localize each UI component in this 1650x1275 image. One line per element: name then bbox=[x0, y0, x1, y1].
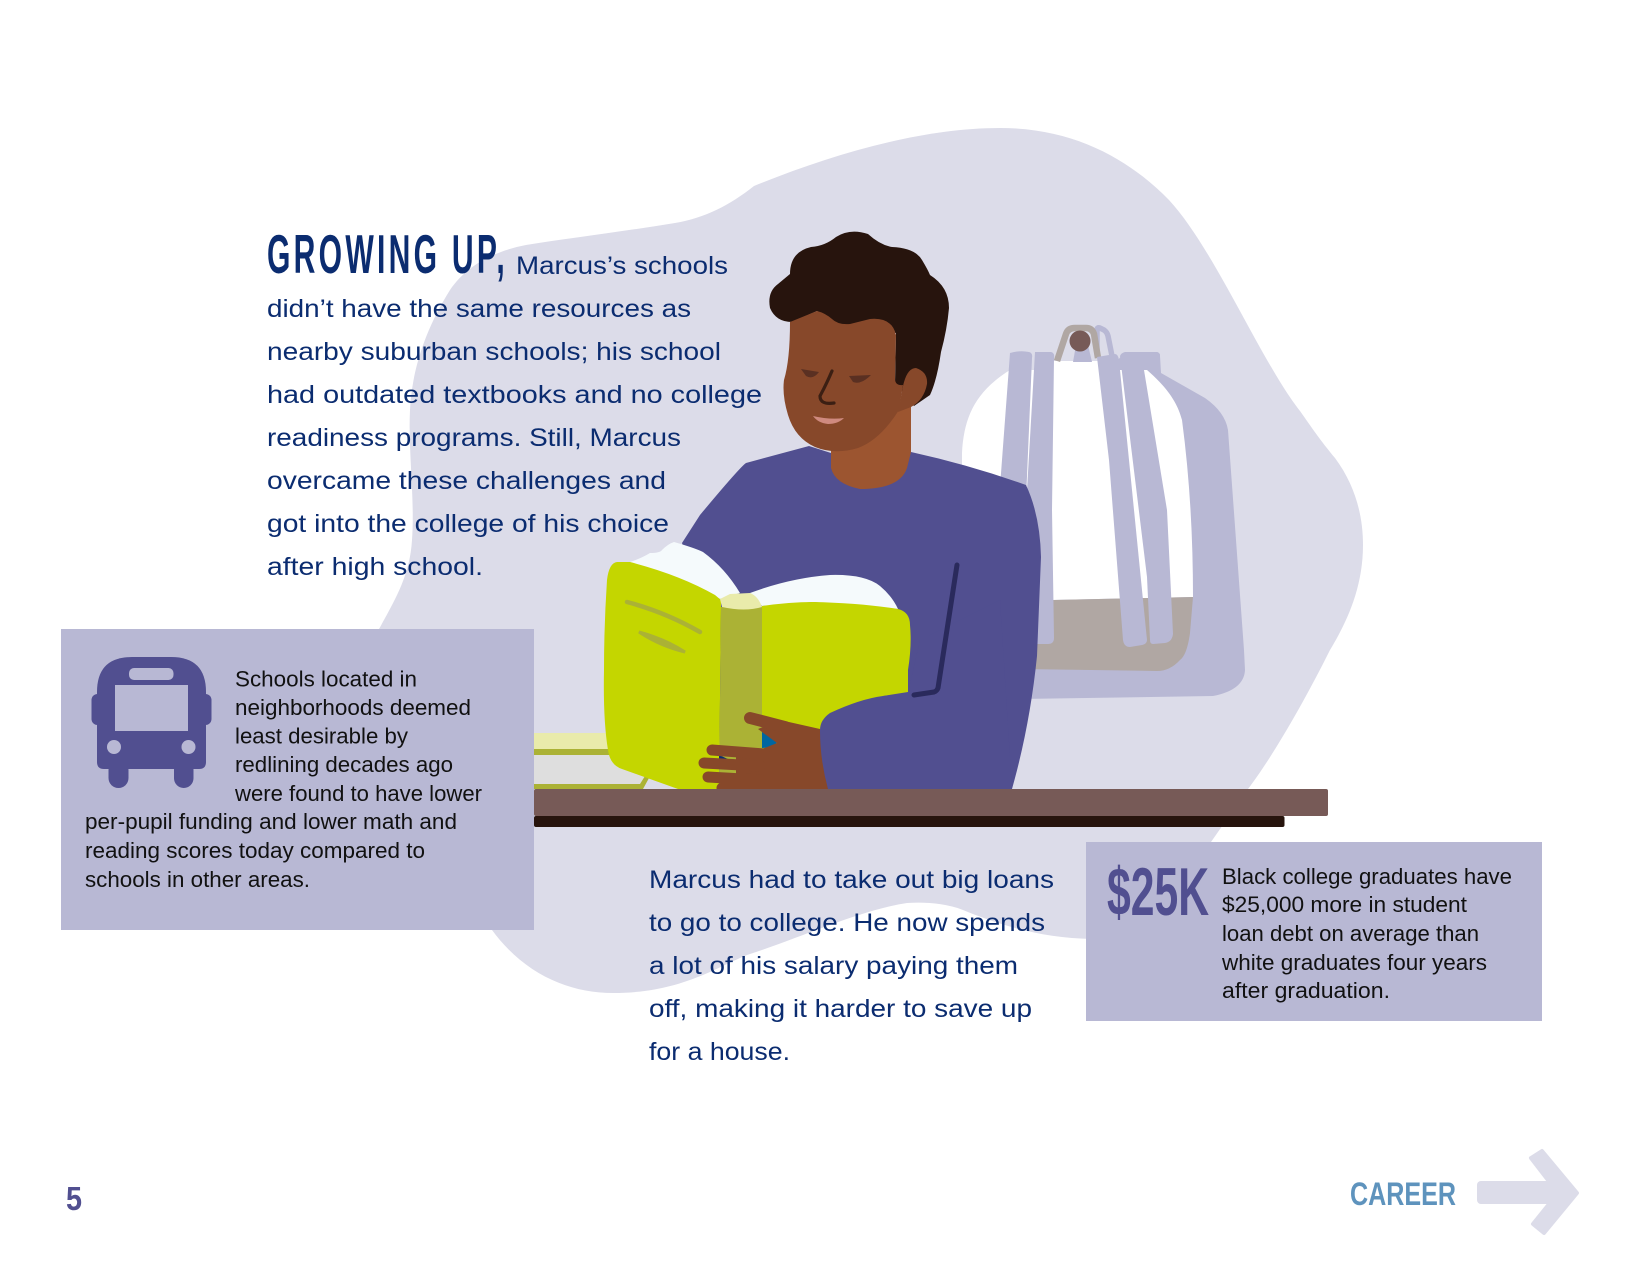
sleeve seam detail bbox=[914, 565, 957, 695]
eyes bbox=[801, 369, 871, 383]
loans paragraph: for a house. bbox=[649, 1038, 790, 1066]
intro text: Marcus’s schools bbox=[516, 252, 728, 280]
panel text bbox=[85, 666, 482, 892]
panel: redlining fact bbox=[61, 629, 534, 930]
panel text: reading scores today compared to bbox=[85, 838, 425, 863]
intro text: readiness programs. Still, Marcus bbox=[267, 424, 681, 452]
table bbox=[534, 789, 1328, 827]
panel text: after graduation. bbox=[1222, 978, 1390, 1003]
illustration: hand bbox=[704, 718, 828, 789]
panel text: neighborhoods deemed bbox=[235, 695, 471, 720]
illustration: sweater body bbox=[682, 446, 1041, 789]
illustration: open book bbox=[604, 542, 911, 789]
stat: $25K: $25K bbox=[1107, 854, 1209, 930]
intro text: after high school. bbox=[267, 553, 483, 581]
panel text: redlining decades ago bbox=[235, 752, 453, 777]
panel: student debt fact bbox=[1086, 842, 1542, 1021]
next section label: CAREER bbox=[1350, 1176, 1456, 1212]
panel text: least desirable by bbox=[235, 724, 408, 748]
panel text: were found to have lower bbox=[234, 781, 482, 806]
nose bbox=[820, 371, 834, 403]
intro text: nearby suburban schools; his school bbox=[267, 338, 721, 366]
intro text: got into the college of his choice bbox=[267, 510, 669, 538]
loans paragraph: to go to college. He now spends bbox=[649, 909, 1045, 937]
icon: school bus bbox=[92, 657, 212, 788]
loans paragraph: a lot of his salary paying them bbox=[649, 952, 1018, 980]
panel text: per-pupil funding and lower math and bbox=[85, 809, 457, 834]
intro text: didn’t have the same resources as bbox=[267, 295, 691, 323]
loans paragraph: off, making it harder to save up bbox=[649, 995, 1032, 1023]
ear bbox=[898, 368, 927, 412]
panel text: loan debt on average than bbox=[1222, 921, 1479, 946]
illustration: marcus head and neck bbox=[769, 232, 949, 489]
arrow bbox=[1477, 1151, 1577, 1233]
neck bbox=[831, 400, 911, 489]
illustration: sleeve bbox=[820, 600, 1012, 789]
face bbox=[784, 311, 903, 451]
panel text bbox=[1221, 864, 1512, 1003]
background blob bbox=[379, 128, 1363, 993]
panel text: Black college graduates have bbox=[1222, 864, 1512, 889]
panel text: $25,000 more in student bbox=[1222, 892, 1467, 917]
intro text: overcame these challenges and bbox=[267, 467, 666, 495]
loans paragraph bbox=[649, 866, 1054, 1066]
panel text: Schools located in bbox=[235, 666, 417, 692]
hair bbox=[769, 232, 949, 406]
intro text bbox=[267, 252, 762, 581]
heading: GROWING UP, bbox=[267, 223, 508, 285]
page number: 5 bbox=[66, 1180, 82, 1217]
mouth bbox=[813, 416, 844, 424]
loans paragraph: Marcus had to take out big loans bbox=[649, 866, 1054, 894]
illustration: stacked books bbox=[534, 733, 649, 789]
heading and intro paragraph bbox=[267, 223, 762, 581]
panel text: schools in other areas. bbox=[85, 867, 310, 892]
illustration: backpack bbox=[962, 328, 1245, 699]
intro text: had outdated textbooks and no college bbox=[267, 381, 762, 409]
panel text: white graduates four years bbox=[1221, 950, 1487, 975]
